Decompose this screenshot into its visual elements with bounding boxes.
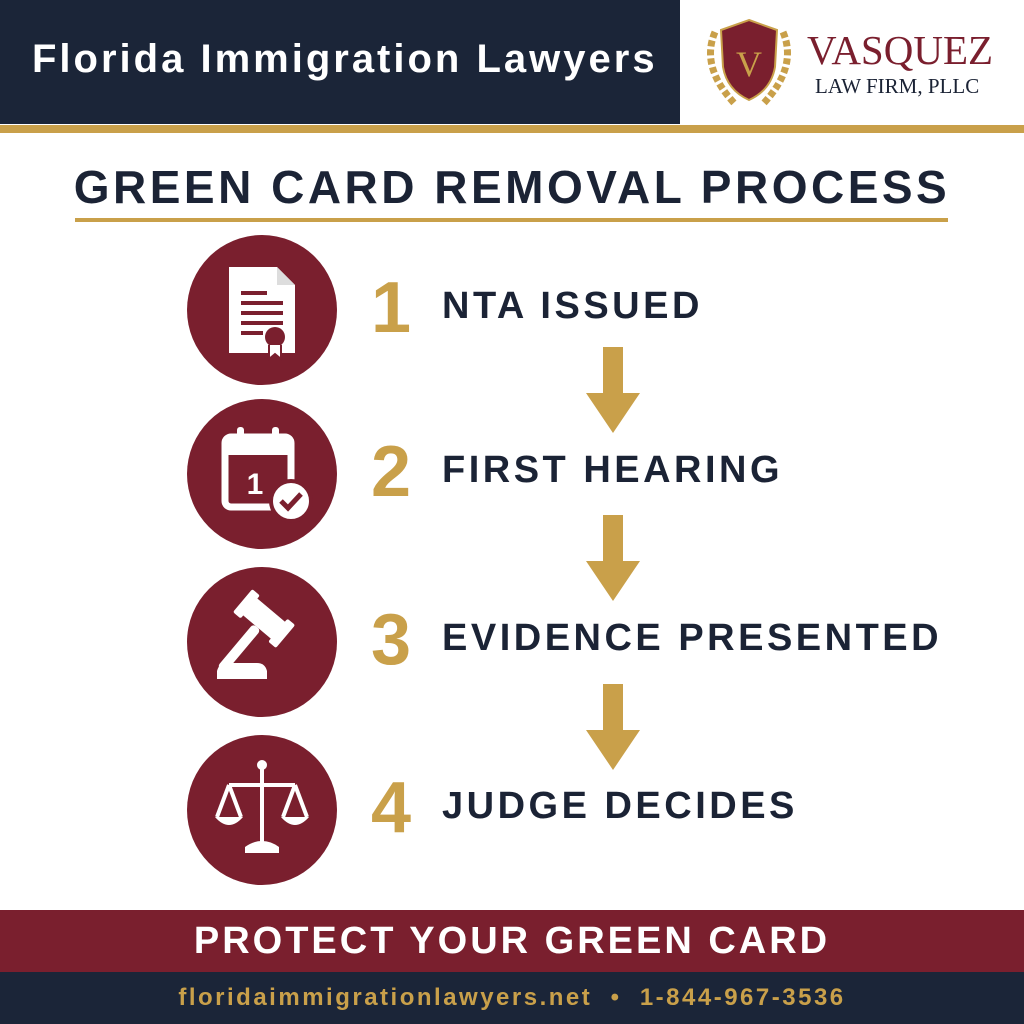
header bar <box>0 0 680 124</box>
logo emblem: V <box>736 44 762 84</box>
number 1: 1 <box>371 268 411 348</box>
step 3 <box>187 567 942 717</box>
icon: document <box>187 235 337 385</box>
header title: Florida Immigration Lawyers <box>32 37 658 81</box>
step 4 <box>187 735 798 885</box>
logo text: VASQUEZ <box>807 27 993 73</box>
icon: calendar: 1 <box>247 468 263 501</box>
step 1 <box>187 235 703 385</box>
logo: LAW FIRM, PLLC <box>815 74 979 98</box>
arrow 1 <box>586 347 640 433</box>
icon: scales <box>187 735 337 885</box>
footer contact <box>0 972 1024 1024</box>
number 3: 3 <box>371 600 411 680</box>
label: JUDGE DECIDES <box>442 785 798 827</box>
label: EVIDENCE PRESENTED <box>442 617 942 659</box>
logo emblem <box>707 19 791 106</box>
arrow 2 <box>586 515 640 601</box>
banner: protect: PROTECT YOUR GREEN CARD <box>194 920 830 962</box>
icon: gavel <box>187 567 337 717</box>
main title: GREEN CARD REMOVAL PROCESS <box>74 161 950 213</box>
label: FIRST HEARING <box>442 449 783 491</box>
label: NTA ISSUED <box>442 285 703 327</box>
arrow 3 <box>586 684 640 770</box>
logo <box>707 19 993 106</box>
banner: protect <box>0 910 1024 972</box>
icon: calendar <box>187 399 337 549</box>
number 4: 4 <box>371 768 411 848</box>
number 2: 2 <box>371 432 411 512</box>
step 2 <box>187 399 783 549</box>
footer contact: floridaimmigrationlawyers.net • 1-844-967-3536 <box>178 984 846 1011</box>
